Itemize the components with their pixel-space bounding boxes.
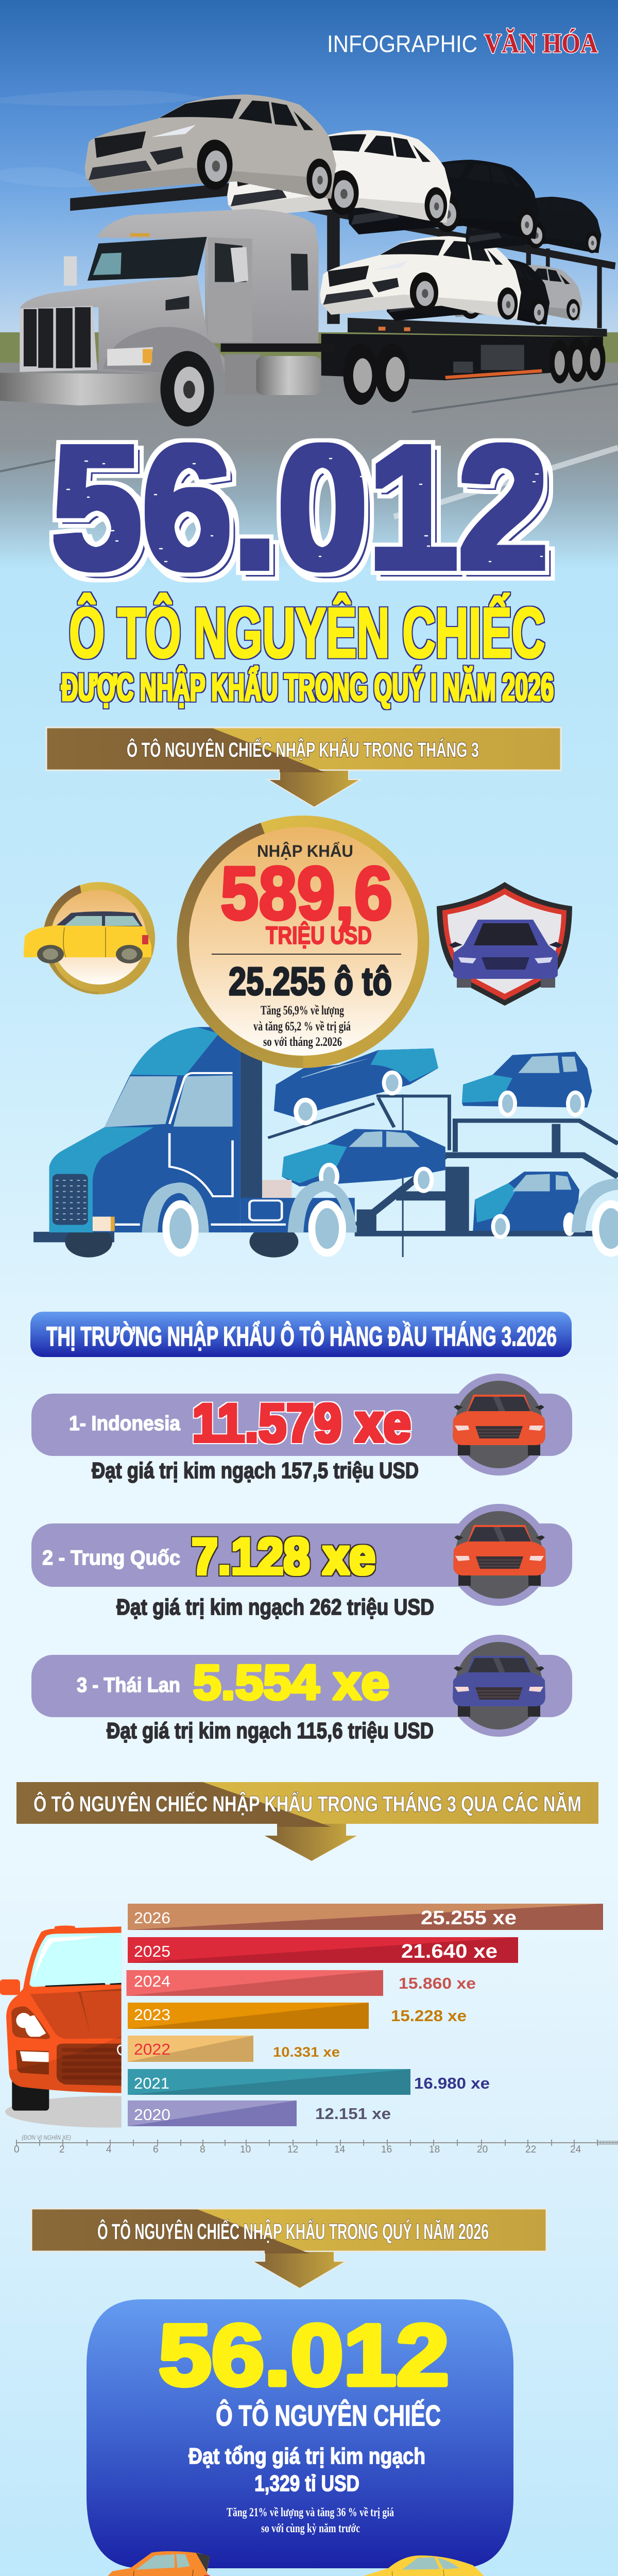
truck car: lower right — [473, 1172, 579, 1239]
market row: Indonesia March: 1- Indonesia — [69, 1412, 181, 1435]
chart axis: thousand vehicles: 20 — [477, 2144, 488, 2155]
bar: 2022: 10.331 xe — [273, 2044, 340, 2060]
heading: top import markets March 2026 — [30, 1312, 572, 1357]
growth note — [227, 2506, 394, 2535]
bar: 2023: 15.228 xe — [391, 2007, 467, 2025]
bar: 2021: 2021 — [134, 2074, 169, 2092]
market row: Indonesia March: 11.579 xe — [192, 1393, 411, 1453]
growth note: so với cùng kỳ năm trước — [261, 2522, 360, 2535]
badge: shield with blue car — [437, 882, 572, 1006]
chart axis: thousand vehicles: 0 — [14, 2144, 20, 2155]
growth note — [253, 1004, 351, 1049]
market row: Thailand March: 3 - Thái Lan — [77, 1674, 180, 1697]
bar: 2026 — [128, 1904, 603, 1930]
note: Thailand March value: Đạt giá trị kim ngạch 115,6 triệu USD — [107, 1718, 434, 1743]
truck car: upper left — [274, 1048, 438, 1125]
icon: orange-red car — [453, 1525, 546, 1586]
section banner: Q1 2026 imports — [31, 2209, 546, 2289]
cars on upper deck — [85, 94, 602, 253]
panel: Q1 2026 total — [87, 2299, 513, 2568]
market row: Thailand March: 5.554 xe — [193, 1655, 389, 1710]
label: imports: NHẬP KHẨU — [257, 842, 353, 860]
truck cab — [49, 1027, 618, 1257]
unit: million USD: TRIỆU USD — [266, 921, 372, 950]
bar: 2026: 25.255 xe — [421, 1907, 517, 1929]
market row: China March: 2 - Trung Quốc — [42, 1547, 180, 1569]
bar: 2025 — [128, 1937, 518, 1963]
value: 56,012: 56.012 — [159, 2307, 449, 2403]
brand logo: Infographic Văn Hóa — [327, 28, 598, 59]
section banner: March imports — [46, 727, 561, 807]
bar: 2026: 2026 — [134, 1909, 170, 1927]
truck car: middle — [282, 1129, 445, 1193]
note: China March value: Đạt giá trị kim ngạch 262 triệu USD — [116, 1595, 434, 1620]
chart axis: thousand vehicles: 24 — [570, 2144, 581, 2155]
bar: 2024: 2024 — [134, 1972, 170, 1990]
total turnover: Đạt tổng giá trị kim ngạch — [188, 2444, 425, 2469]
bar chart: imports in March by year — [127, 1904, 603, 2126]
chart axis: thousand vehicles: 14 — [334, 2144, 346, 2155]
illustration: blue car carrier truck — [33, 1027, 618, 1258]
chart axis: thousand vehicles: 2 — [59, 2144, 65, 2155]
bar: 2022: 2022 — [134, 2040, 170, 2058]
market row: Thailand March — [31, 1635, 572, 1737]
chart axis: thousand vehicles: 12 — [287, 2144, 298, 2155]
hero photo: car transporter truck on highway — [0, 0, 618, 569]
chart axis: thousand vehicles: 22 — [525, 2144, 536, 2155]
bar: 2024: 15.860 xe — [399, 1974, 476, 1992]
bar: 2020: 2020 — [134, 2106, 170, 2124]
chart axis: thousand vehicles: 18 — [429, 2144, 440, 2155]
brand logo: Infographic Văn Hóa: INFOGRAPHIC — [327, 30, 477, 57]
chart axis: thousand vehicles: 10 — [240, 2144, 251, 2155]
bar: 2021 — [128, 2069, 490, 2095]
chart axis: thousand vehicles: 16 — [381, 2144, 392, 2155]
market row: China March — [31, 1504, 572, 1606]
chart axis: thousand vehicles: 4 — [106, 2144, 112, 2155]
value: 25,255 cars: 25.255 ô tô — [229, 960, 392, 1004]
label: complete cars: Ô TÔ NGUYÊN CHIẾC — [216, 2399, 441, 2432]
truck car: upper right — [462, 1052, 592, 1117]
main number: 56.012: 56.012 — [52, 410, 548, 605]
icon: orange car front view — [0, 1926, 122, 2128]
value: 1.329 billion USD: 1,329 tỉ USD — [254, 2471, 359, 2496]
bar: 2023: 2023 — [134, 2006, 170, 2024]
bar: 2021: 16.980 xe — [414, 2074, 490, 2092]
growth note: và tăng 65,2 % về trị giá — [253, 1020, 351, 1033]
growth note: so với tháng 2.2026 — [263, 1035, 342, 1049]
central stat circle — [177, 816, 430, 1068]
chart axis: thousand vehicles: 8 — [200, 2144, 205, 2155]
market row: China March: 7.128 xe — [192, 1528, 375, 1585]
market row: Indonesia March — [31, 1374, 572, 1476]
section banner: March across the years — [16, 1782, 598, 1861]
bar: 2024 — [127, 1970, 476, 1996]
brand logo: Infographic Văn Hóa: VĂN HÓA — [484, 28, 598, 59]
note: Indonesia March value: Đạt giá trị kim ngạch 157,5 triệu USD — [92, 1458, 419, 1483]
bar: 2022 — [128, 2036, 340, 2062]
badge: yellow mini car in circle — [24, 882, 155, 994]
bar: 2020 — [128, 2100, 391, 2126]
icons: orange and yellow cars — [98, 2551, 495, 2576]
chart axis: thousand vehicles: (ĐƠN VỊ NGHÌN XE) — [22, 2134, 71, 2141]
growth note: Tăng 56,9% về lượng — [261, 1004, 344, 1018]
icon: red car — [453, 1395, 545, 1455]
chart axis: thousand vehicles: 6 — [153, 2144, 159, 2155]
bar: 2023 — [128, 2003, 467, 2029]
bar: 2025: 2025 — [134, 1942, 170, 1960]
bar: 2025: 21.640 xe — [401, 1941, 497, 1962]
chart axis: thousand vehicles — [14, 2134, 618, 2155]
bar: 2020: 12.151 xe — [315, 2105, 391, 2123]
value: 589,6: 589,6 — [220, 851, 392, 935]
silver and dark cars on lower deck — [320, 236, 582, 325]
growth note: Tăng 21% về lượng và tăng 36 % về trị giá — [227, 2506, 394, 2519]
icon: blue car — [453, 1656, 545, 1717]
